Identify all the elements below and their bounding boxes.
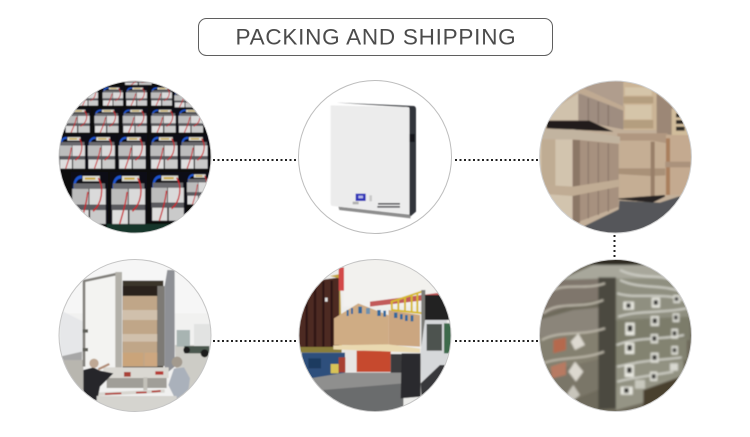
photo circle: battery wall unit xyxy=(298,80,452,234)
dotted connector: cells to battery xyxy=(213,159,297,161)
photo circle: forklift loading xyxy=(297,257,457,417)
dotted connector: truck to forklift xyxy=(213,340,297,342)
photo circle: wooden crates xyxy=(537,78,693,237)
dotted connector: battery to crates xyxy=(455,159,538,161)
photo circle: wrapped pallets xyxy=(537,257,693,413)
photo circle: unloading truck xyxy=(57,257,217,417)
title: PACKING AND SHIPPING xyxy=(236,24,516,50)
dotted connector: crates to pallets xyxy=(614,235,616,259)
dotted connector: forklift to pallets xyxy=(455,340,538,342)
title xyxy=(198,18,552,56)
photo circle: battery cells xyxy=(57,77,213,235)
battery unit xyxy=(331,103,416,218)
